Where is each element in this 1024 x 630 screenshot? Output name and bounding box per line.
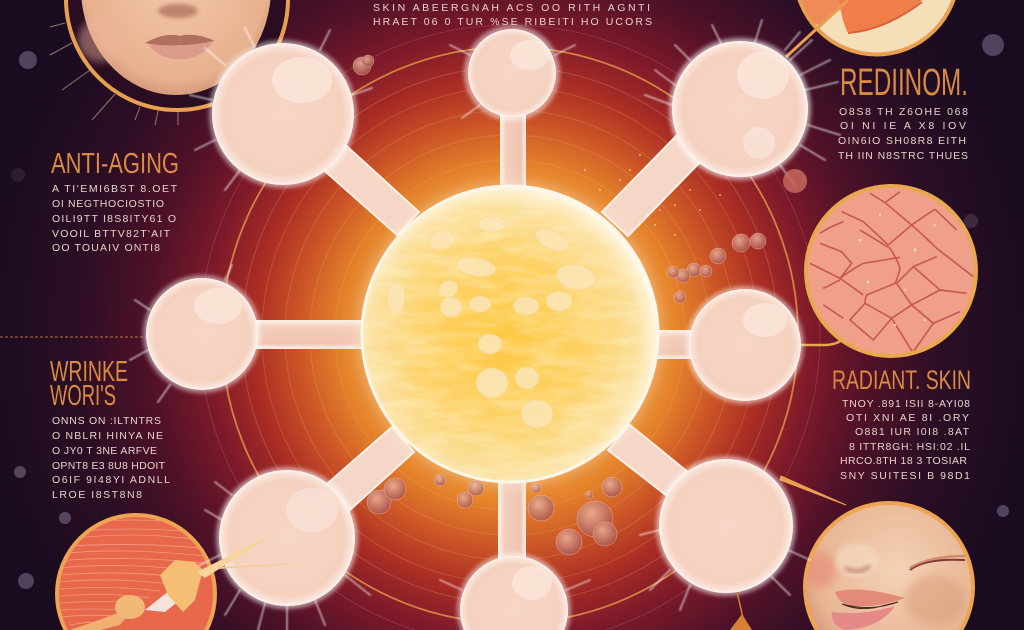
body text bbox=[52, 183, 178, 254]
body text: HRCO.8TH 18 3 TOSIAR bbox=[840, 455, 967, 467]
body text: OI NEGTHOCIOSTIO bbox=[52, 198, 164, 210]
sphere: bottom bbox=[457, 553, 571, 630]
block: redness bbox=[838, 62, 968, 162]
body text: OO TOUAIV ONTI8 bbox=[52, 242, 160, 254]
strand line bbox=[786, 0, 848, 57]
body text: OIN6IO SH08R8 EITH bbox=[838, 135, 966, 147]
bubbles bbox=[353, 55, 807, 555]
body text: O NBLRI HINYA NE bbox=[52, 430, 163, 442]
heading: RADIANT. SKIN bbox=[832, 365, 971, 395]
body text: OI NI IE A X8 IOV bbox=[840, 120, 966, 132]
image: fibres, bottom left bbox=[57, 515, 215, 630]
rods connecting the spheres to the core bbox=[235, 90, 722, 578]
body text bbox=[840, 398, 970, 482]
satellite spheres bbox=[143, 25, 811, 630]
image: face, top left bbox=[66, 0, 288, 110]
marker at bottom bbox=[730, 592, 752, 630]
connector line bbox=[790, 340, 842, 345]
orange pointer bbox=[780, 476, 846, 505]
body text: O881 IUR I0I8 .8AT bbox=[855, 426, 970, 438]
body text: OPNT8 E3 8U8 HDOIT bbox=[52, 460, 166, 472]
body text: 8 ITTR8GH: HSI:02 .IL bbox=[849, 441, 970, 453]
top caption: HRAET 06 0 TUR %SE RIBEITI HO UCORS bbox=[373, 16, 652, 28]
body text: OILI9TT I8S8ITY61 O bbox=[52, 213, 176, 225]
sphere: top bbox=[464, 25, 560, 121]
block: wrinkle bbox=[50, 356, 170, 501]
body text: OTI XNI AE 8I .ORY bbox=[846, 412, 969, 424]
block: anti-aging bbox=[51, 148, 179, 254]
body text: VOOIL BTTV82T'AIT bbox=[52, 228, 171, 240]
heading: WRINKE bbox=[50, 356, 128, 388]
body text: O JY0 T 3NE ARFVE bbox=[52, 445, 157, 457]
body text bbox=[838, 106, 968, 162]
sphere rays bbox=[130, 20, 840, 630]
body text: ONNS ON :ILTNTRS bbox=[52, 415, 161, 427]
top caption bbox=[373, 2, 652, 28]
fibre bundle and spikes, bottom left bbox=[160, 530, 325, 612]
body text: SNY SUITESI B 98D1 bbox=[840, 470, 970, 482]
top caption: SKIN ABEERGNAH ACS OO RITH AGNTI bbox=[373, 2, 650, 14]
heading bbox=[50, 356, 128, 412]
central vitamin sphere bbox=[362, 186, 658, 482]
heading: ANTI-AGING bbox=[51, 148, 179, 180]
body text: TH IIN N8STRC THUES bbox=[838, 150, 968, 162]
sphere: lower left bbox=[216, 467, 358, 609]
sphere: upper right bbox=[669, 38, 811, 180]
heading: WORI'S bbox=[50, 380, 116, 412]
sphere: upper left bbox=[209, 40, 357, 188]
body text bbox=[52, 415, 170, 501]
body text: TNOY .891 ISII 8-AYI08 bbox=[842, 398, 970, 410]
image: skin cells, right bbox=[790, 186, 976, 356]
body text: O8S8 TH Z6OHE 068 bbox=[839, 106, 968, 118]
radial lines around top left portrait bbox=[50, 23, 178, 125]
body text: A TI'EMI6BST 8.OET bbox=[52, 183, 178, 195]
image: feather-like tissue, top right bbox=[786, 0, 958, 57]
concentric orbit rings bbox=[200, 25, 820, 630]
cells inside the sphere bbox=[387, 216, 598, 428]
sphere: lower right bbox=[656, 456, 796, 596]
body text: O6IF 9I48YI ADNLL bbox=[52, 474, 170, 486]
sparkle dust bbox=[584, 154, 721, 236]
sphere: left bbox=[143, 275, 261, 393]
body text: LROE I8ST8N8 bbox=[52, 489, 142, 501]
sphere: right bbox=[686, 286, 804, 404]
block: radiant skin bbox=[832, 365, 971, 482]
image: face, bottom right bbox=[780, 476, 973, 630]
left guide line bbox=[0, 336, 146, 338]
core glow bbox=[358, 182, 662, 486]
